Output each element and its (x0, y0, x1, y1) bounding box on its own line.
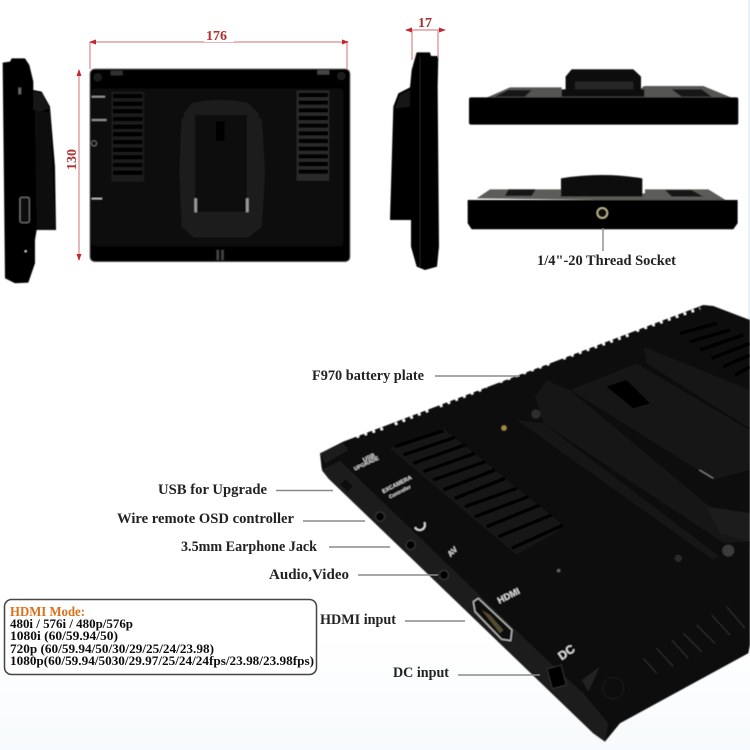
top edge ribs (357, 308, 700, 437)
bottom edge view of monitor with socket (468, 175, 738, 229)
leader: DC (458, 674, 540, 676)
left vent (111, 92, 144, 182)
dimension 176 (89, 28, 349, 69)
HDMI mode box (4, 600, 316, 674)
perspective rear view of monitor (320, 305, 750, 742)
label: Wire remote OSD controller: Wire remote OSD controller (117, 511, 295, 527)
right vent (297, 91, 329, 181)
upper right vent (680, 323, 750, 375)
port labels: Controller (388, 484, 412, 500)
port labels: USB (362, 453, 377, 464)
port labels: AV (446, 544, 460, 559)
HDMI mode box: HDMI Mode: (10, 604, 85, 619)
thread socket leader line (602, 228, 604, 251)
battery plate (175, 92, 267, 237)
dimension 17 (405, 16, 446, 60)
bottom right ribs (643, 607, 745, 673)
HDMI mode box: 1080i (60/59.94/50) (10, 629, 118, 643)
leader: battery plate (435, 375, 520, 377)
back view of monitor (90, 69, 350, 262)
leader: USB (276, 490, 333, 492)
dimension 130: 130 (65, 149, 80, 170)
leader: AV (358, 574, 438, 576)
port labels (353, 453, 578, 663)
label: HDMI input: HDMI input (320, 612, 396, 628)
top edge view of monitor (469, 69, 738, 125)
HDMI mode box: 1080p(60/59.94/5030/29.97/25/24/24fps/23.98/23.98fps) (10, 654, 314, 668)
port labels: EXCAMERA (382, 475, 413, 495)
HDMI mode box: 720p (60/59.94/50/30/29/25/24/23.98) (10, 642, 214, 656)
ports (341, 479, 353, 491)
leader: earphone (329, 546, 390, 548)
port labels: UPGRADE (353, 456, 380, 472)
label: Audio, Video: Audio,Video (269, 567, 349, 583)
dimension 17: 17 (418, 16, 432, 31)
label: DC input: DC input (393, 665, 449, 681)
dimension 130 (62, 69, 82, 261)
battery plate (513, 345, 750, 567)
label: F970 battery plate: F970 battery plate (312, 368, 425, 384)
left side view of monitor (3, 58, 56, 283)
middle side view of monitor (390, 52, 439, 270)
vent (390, 428, 565, 555)
port labels: HDMI (496, 586, 521, 606)
leader: HDMI (405, 620, 465, 622)
leader: OSD controller (303, 520, 365, 522)
HDMI mode box: 480i / 576i / 480p/576p (10, 617, 133, 631)
label: earphone jack: 3.5mm Earphone Jack (181, 539, 318, 555)
label: USB for Upgrade: USB for Upgrade (158, 482, 268, 498)
port labels: DC (555, 641, 578, 663)
left edge band (322, 461, 608, 742)
thread socket label: 1/4"-20 Thread Socket (537, 253, 676, 269)
dimension 176: 176 (206, 29, 227, 44)
